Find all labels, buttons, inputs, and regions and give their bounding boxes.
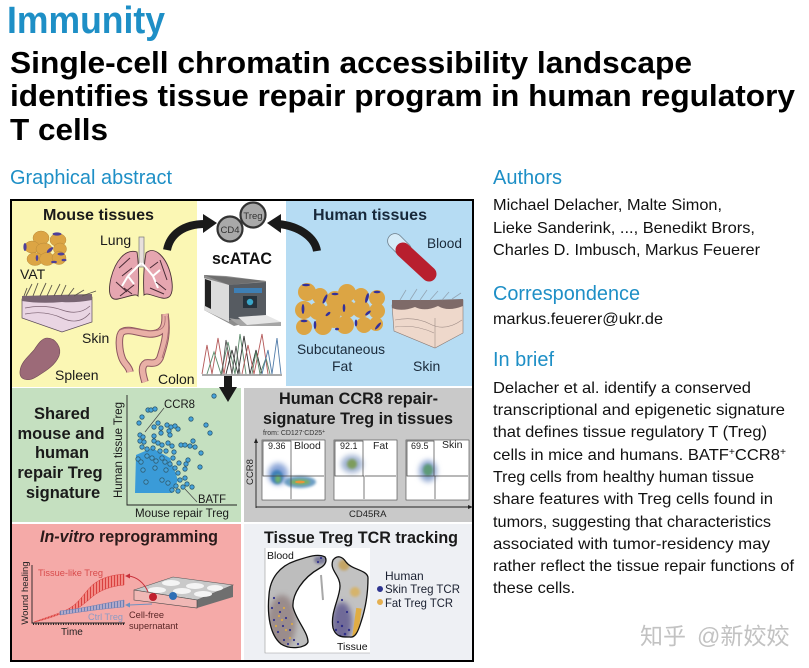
wound healing chart [20,561,125,638]
icon: blood tube [395,241,429,274]
flow plot: blood [262,440,325,500]
heading: in-vitro reprogramming: In-vitro reprogramming [40,528,218,546]
in brief block: transcriptional and epigenetic signature [493,402,785,419]
heading: human tissues: Human tissues [313,207,427,224]
icon: CD4 and Treg cells: Treg [243,211,263,222]
arrow: red supernatant [125,574,148,592]
legend: Human [385,569,424,583]
well plate [134,577,233,608]
authors block [493,167,761,259]
flow plot: fat: Fat [373,440,388,452]
label: subcutaneous fat: Subcutaneous [297,341,385,357]
heading: shared mouse and human repair Treg signature: repair Treg [17,464,103,482]
flow plot: skin: 69.5 [411,441,429,451]
watermark [640,623,789,649]
panel: shared repair signature [12,388,241,522]
label: Lung: Lung [100,232,131,248]
heading: shared mouse and human repair Treg signature: Shared [34,405,90,423]
in brief block: associated with tumor-residency may [493,536,770,553]
article title: Single-cell chromatin accessibility landscape [10,45,692,80]
arrow: human to scATAC [267,214,317,251]
panel: scATAC [167,202,317,375]
label: subcutaneous fat: Fat [332,358,352,374]
axes: CCR8 [245,459,256,485]
axes: CD45RA [349,509,387,520]
label: blood: Blood [427,235,462,251]
heading: mouse tissues: Mouse tissues [43,207,154,224]
label: cell-free supernatant [129,610,178,632]
heading: shared mouse and human repair Treg signature: signature [26,484,100,502]
heading: shared mouse and human repair Treg signature [17,405,105,502]
authors block: Michael Delacher, Malte Simon, [493,197,722,214]
in brief block: Treg cells from healthy human tissue [493,469,754,486]
flow plot: blood: Blood [294,440,321,452]
in brief block: share features with Treg cells found in [493,491,773,508]
authors block: Charles D. Imbusch, Markus Feuerer [493,242,761,259]
label: human skin: Skin [413,358,440,374]
wound healing chart: Ctrl Treg [88,612,123,623]
authors block: Authors [493,167,562,189]
arrow: mouse to scATAC [167,214,217,250]
heading: scATAC: scATAC [212,250,272,268]
heading: human CCR8: signature Treg in tissues [263,410,453,428]
panel: tissue Treg TCR tracking [244,524,472,660]
chromatogram [202,334,282,375]
icon: sequencer machine [204,275,281,326]
wound healing chart: Time [61,627,83,638]
legend: Fat Treg TCR [385,596,453,610]
in brief block: cells in mice and humans. BATF [493,447,721,464]
label: subcutaneous fat [297,341,385,374]
watermark: 知乎 [640,623,686,649]
label: cell-free supernatant: supernatant [129,621,178,632]
in brief block: these cells. [493,580,575,597]
icon: human skin [392,289,463,348]
icon: CD4 and Treg cells: CD4 [220,225,240,236]
icon: VAT fat cells [23,231,66,266]
icon: CD4 and Treg cells [218,202,266,242]
watermark: @新姣姣 [697,623,789,649]
in brief block: rather reflect the tissue repair functions of [493,558,795,575]
correspondence block [493,283,663,328]
journal name: Immunity: Immunity [7,0,165,42]
icon: spleen [20,338,60,380]
in brief block: Delacher et al. identify a conserved [493,380,751,397]
gating note: - [303,429,305,435]
heading: human CCR8: Human CCR8 repair- [279,390,438,408]
heading: shared mouse and human repair Treg signature: mouse and [17,425,105,443]
icon: mouse skin [22,283,96,332]
flow plot: fat: 92.1 [340,441,358,451]
article title [10,45,796,147]
scatter plot [111,394,237,520]
icon: colon [119,314,169,382]
flow plot: skin: Skin [442,439,463,451]
gating note: + [322,429,325,435]
wound healing chart: Wound healing [20,561,31,625]
heading: TCR tracking: Tissue Treg TCR tracking [264,529,458,547]
panel: in-vitro reprogramming [12,524,241,660]
in brief block: In brief [493,349,554,371]
heading: shared mouse and human repair Treg signature: human [35,444,89,462]
authors block: Lieke Sanderink, ..., Benedikt Brors, [493,220,755,237]
in brief block: + [780,447,786,458]
flow plot: blood: 9.36 [268,441,286,451]
flow plot: fat [334,440,397,500]
UMAP plot [260,548,372,653]
icon: subcutaneous fat cells [295,283,385,335]
UMAP plot: Tissue [337,641,368,653]
label: BATF: BATF [198,492,226,506]
icon: lungs [109,237,172,299]
legend: Skin Treg TCR [385,582,460,596]
heading: graphical abstract: Graphical abstract [10,167,172,189]
label: mouse skin: Skin [82,330,109,346]
article title: T cells [10,112,108,147]
panel: human tissues [286,201,472,386]
label: colon: Colon [158,371,195,387]
gating note: from: CD127 [263,430,303,437]
scatter plot: Human tissue Treg [111,402,125,498]
label: CCR8: CCR8 [164,397,195,411]
in brief block: tumors, suggesting that characteristics [493,514,771,531]
label: cell-free supernatant: Cell-free [129,610,164,621]
panel: human CCR8 repair signature flow cytometry [244,388,473,522]
scatter plot: Mouse repair Treg [135,506,229,520]
legend [377,569,460,610]
article title: identifies tissue repair program in human regulatory [10,78,796,113]
axes [245,438,473,520]
in brief block [493,349,795,597]
label: VAT: VAT [20,266,46,282]
correspondence block: Correspondence [493,283,640,305]
UMAP plot: Blood [267,550,294,562]
flow plot: skin [406,439,469,500]
gating note: CD25 [304,430,322,437]
correspondence block: markus.feuerer@ukr.de [493,311,663,328]
graphical abstract frame [11,200,473,661]
in brief block: + [729,447,735,458]
arrow: blue supernatant [125,602,152,608]
in brief block: that defines tissue regulatory T (Treg) [493,424,767,441]
wound healing chart: Tissue-like Treg [38,568,103,579]
heading: human CCR8 [263,390,453,428]
label: spleen: Spleen [55,367,99,383]
in brief block: CCR8 [735,447,780,464]
panel: mouse tissues [12,201,197,387]
arrow: scATAC to lower panels [219,376,237,402]
